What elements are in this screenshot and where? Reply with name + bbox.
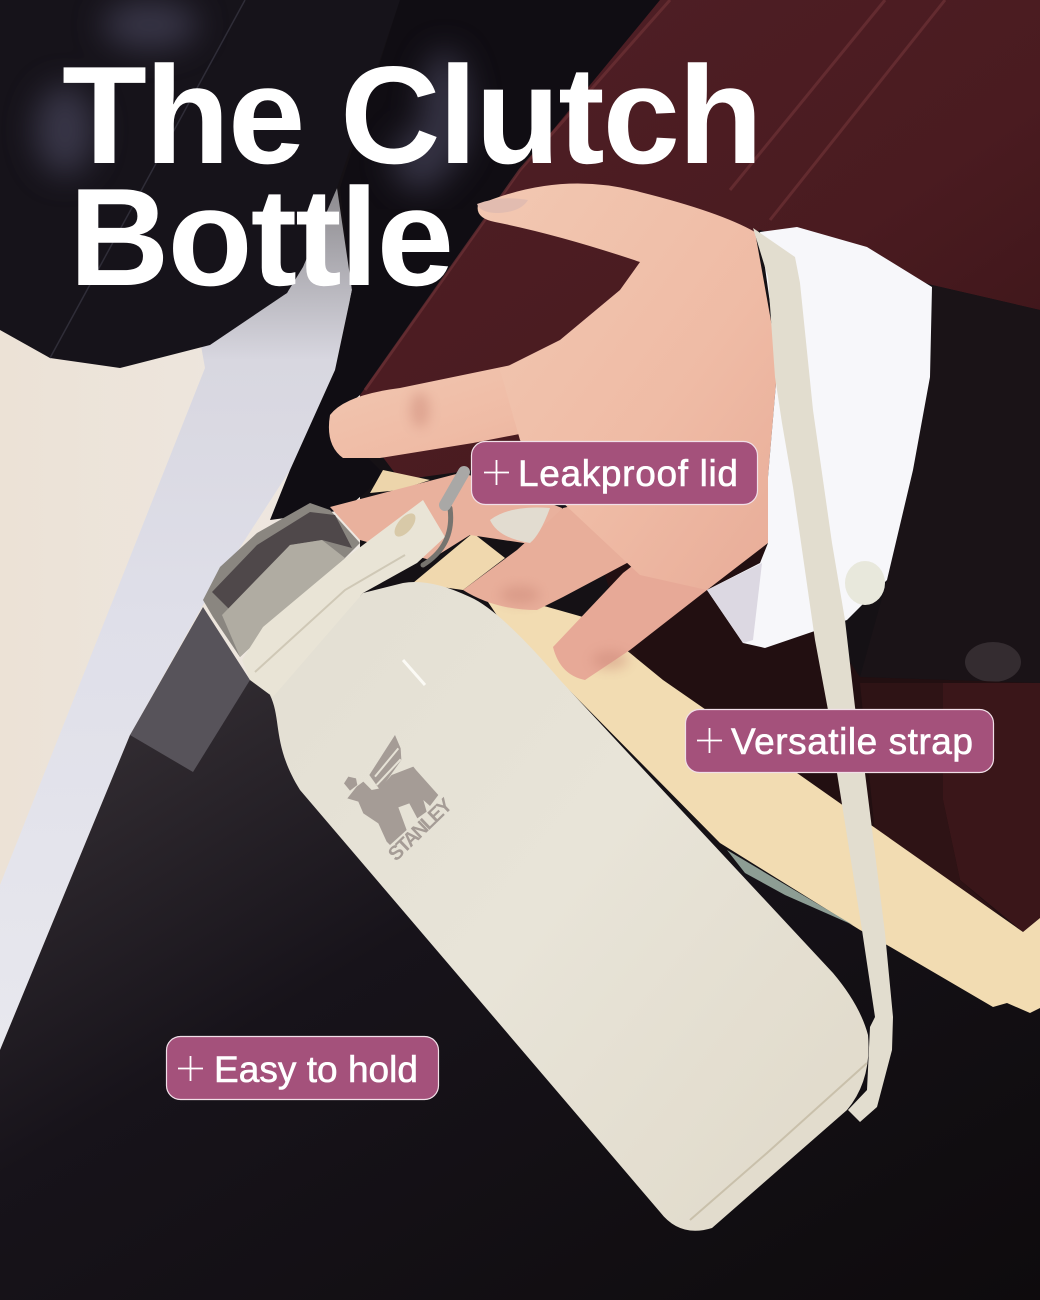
title: Bottle <box>69 160 454 315</box>
callout: leakproof lid <box>472 442 758 504</box>
white shirt cuff <box>707 227 932 648</box>
hand <box>329 184 778 680</box>
maroon folder mid panel <box>860 683 1000 915</box>
callout: easy to hold: Easy to hold <box>214 1049 418 1090</box>
paper scrap upper <box>370 470 430 493</box>
index finger <box>329 355 640 458</box>
cuff button <box>845 561 885 605</box>
jacket seam <box>50 0 245 358</box>
strap <box>753 228 893 1122</box>
dark leather trousers <box>0 680 1040 1300</box>
folder stitching <box>365 0 945 390</box>
callout: leakproof lid: Leakproof lid <box>518 453 738 494</box>
logo: bear <box>344 735 438 845</box>
bottle <box>203 472 869 1231</box>
cuff shadow <box>707 563 762 643</box>
bottle lid <box>203 503 360 657</box>
fingernail <box>477 198 528 213</box>
back of hand <box>478 184 778 590</box>
lower ring finger <box>553 560 720 680</box>
callout: easy to hold <box>166 1036 438 1100</box>
cream backdrop <box>0 300 360 1100</box>
lower middle finger <box>463 490 700 610</box>
stanley logo <box>344 735 457 866</box>
bottle body highlight <box>403 660 425 685</box>
callout: versatile strap: Versatile strap <box>731 721 973 762</box>
lavender coat band <box>0 188 352 1050</box>
collar groove <box>255 555 405 672</box>
metal clasp <box>423 472 464 565</box>
title: The Clutch <box>62 38 763 193</box>
burgundy folder <box>360 0 1040 480</box>
bottle collar and strap loop <box>242 500 445 697</box>
thumbnail <box>490 508 550 543</box>
thumb finger reaching lid <box>330 473 562 560</box>
knuckle shading <box>410 392 628 669</box>
lid silver ring <box>222 540 345 657</box>
logo: wordmark: STANLEY <box>384 794 457 866</box>
leather jacket: centre panel <box>270 0 660 520</box>
jacket highlights <box>35 1 469 190</box>
bottle body <box>270 582 869 1231</box>
lower dark maroon folder <box>600 545 1040 932</box>
black sleeve <box>860 285 1040 683</box>
paper folders <box>480 590 1040 1013</box>
loop hole <box>391 510 419 540</box>
callout: versatile strap <box>686 710 994 772</box>
leather jacket: left shoulder <box>0 0 400 368</box>
sleeve buttons <box>965 642 1021 682</box>
maroon folder panel <box>943 683 1040 932</box>
bag flap <box>130 607 250 772</box>
lid dark ring <box>212 512 352 610</box>
title <box>62 38 763 315</box>
bottle base seam <box>690 1063 867 1220</box>
paper scrap near clasp <box>413 533 505 590</box>
green folder sliver <box>727 850 853 925</box>
